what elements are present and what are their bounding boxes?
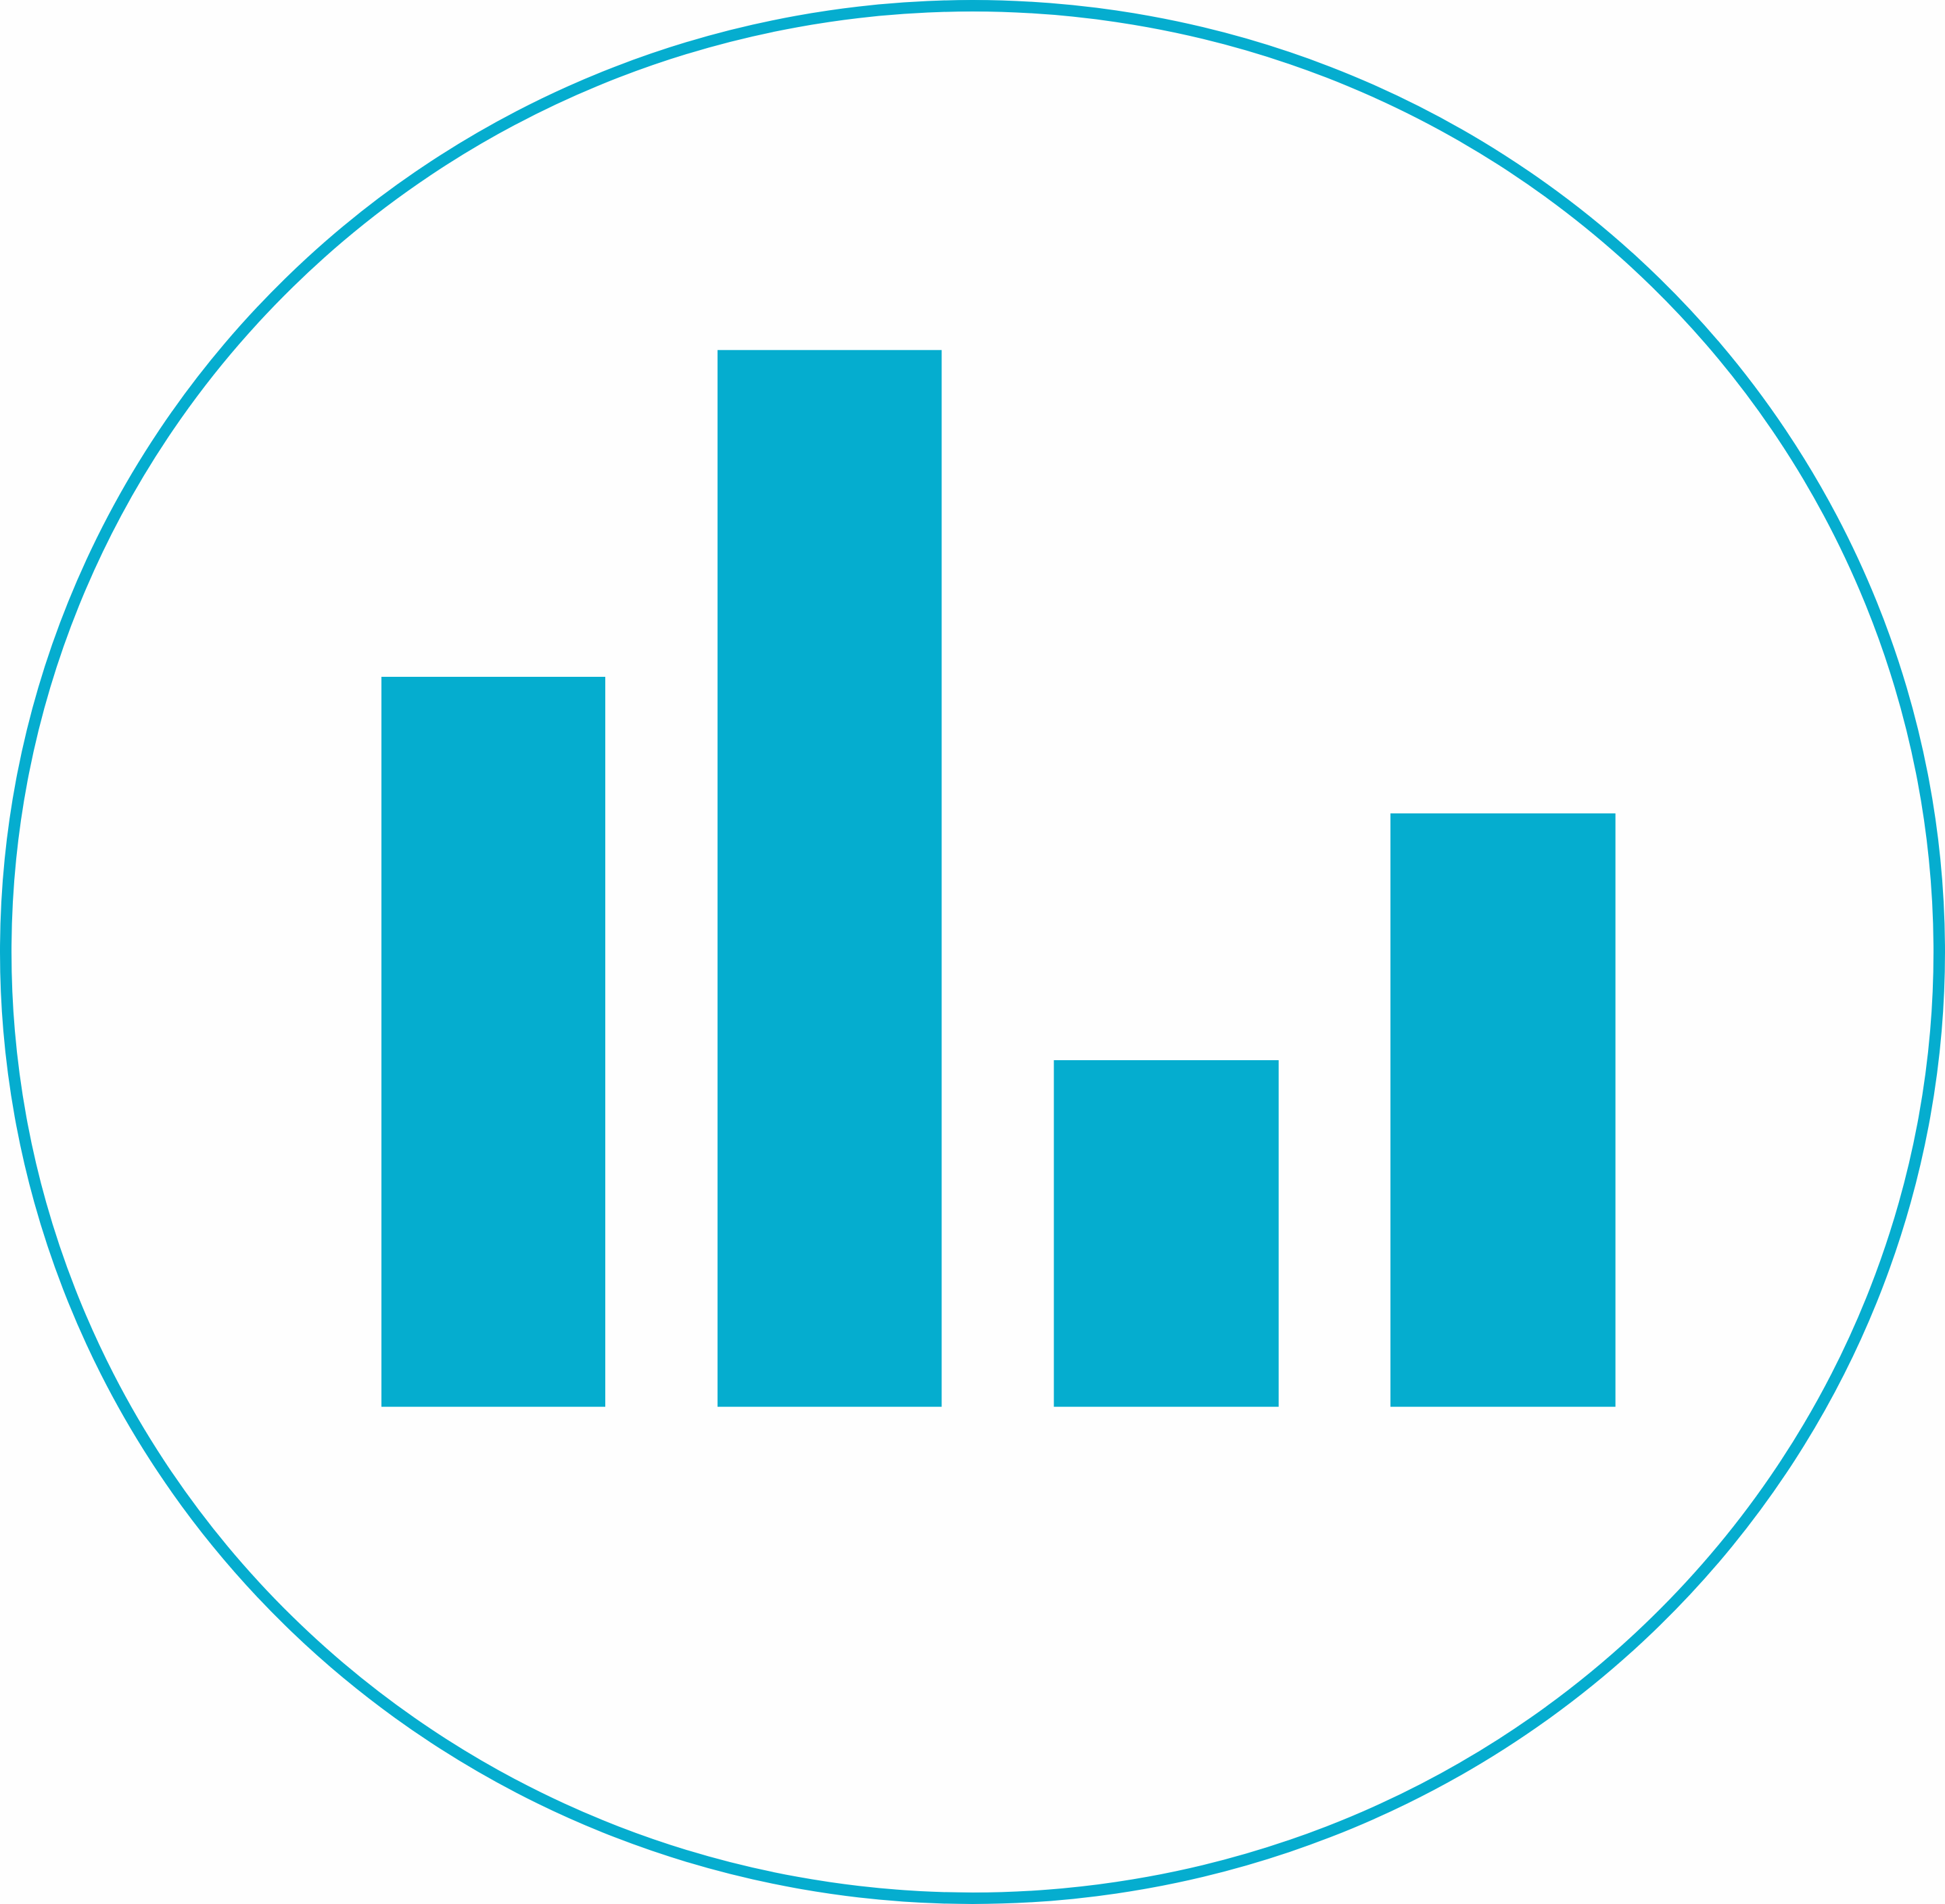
bar 4	[1390, 813, 1616, 1407]
bar chart	[381, 350, 1616, 1407]
bar 3	[1054, 1060, 1279, 1407]
bar 2	[718, 350, 941, 1407]
bar 1	[381, 677, 605, 1407]
